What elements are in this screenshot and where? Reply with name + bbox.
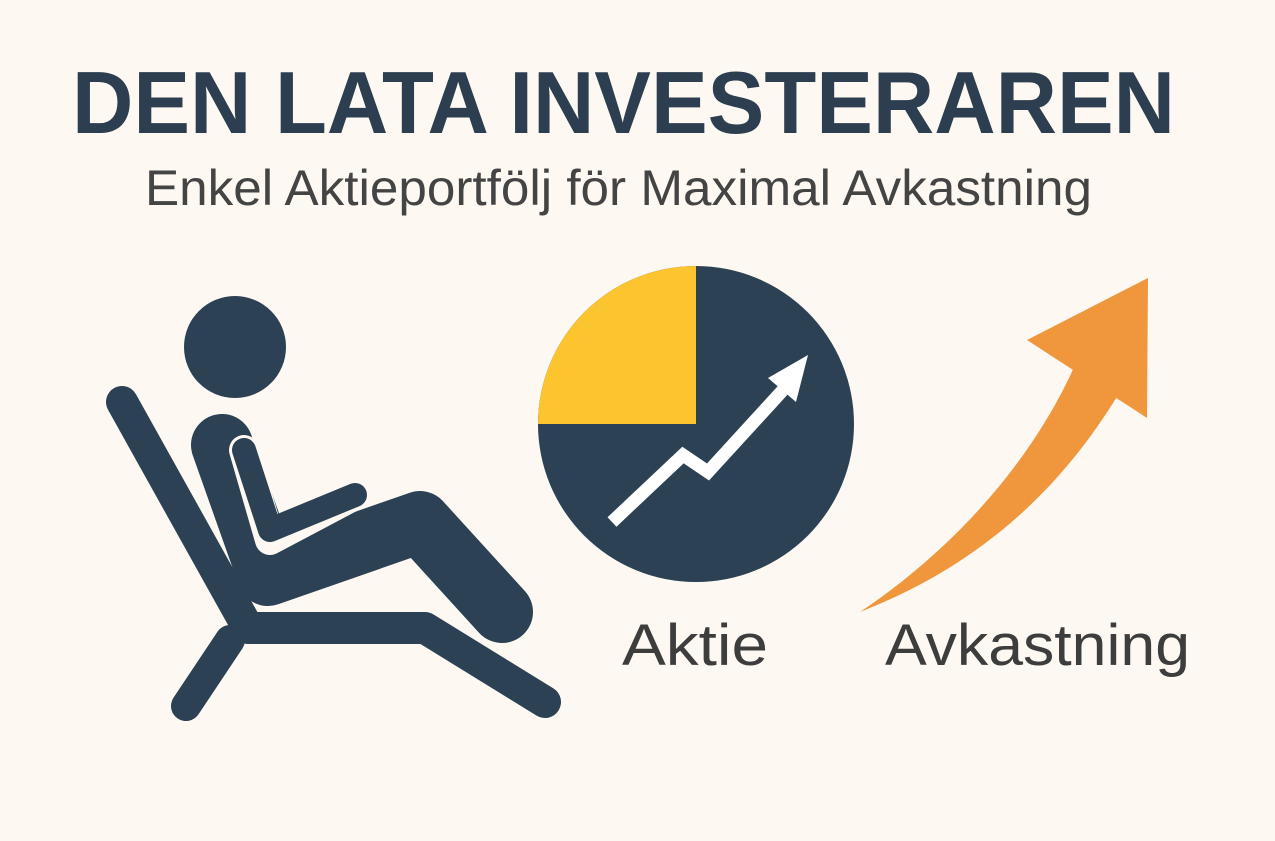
label: Avkastning: Avkastning [885, 613, 1190, 678]
icon: orange growth arrow [860, 278, 1148, 612]
icon: trend arrow [612, 355, 808, 522]
icon: lazy investor in lounge chair [122, 296, 545, 706]
pie chart: Aktie [538, 266, 854, 582]
title: DEN LATA INVESTERAREN [72, 53, 1175, 152]
subtitle: Enkel Aktieportfölj för Maximal Avkastning [145, 160, 1092, 216]
label: Aktie: Aktie [622, 613, 768, 678]
